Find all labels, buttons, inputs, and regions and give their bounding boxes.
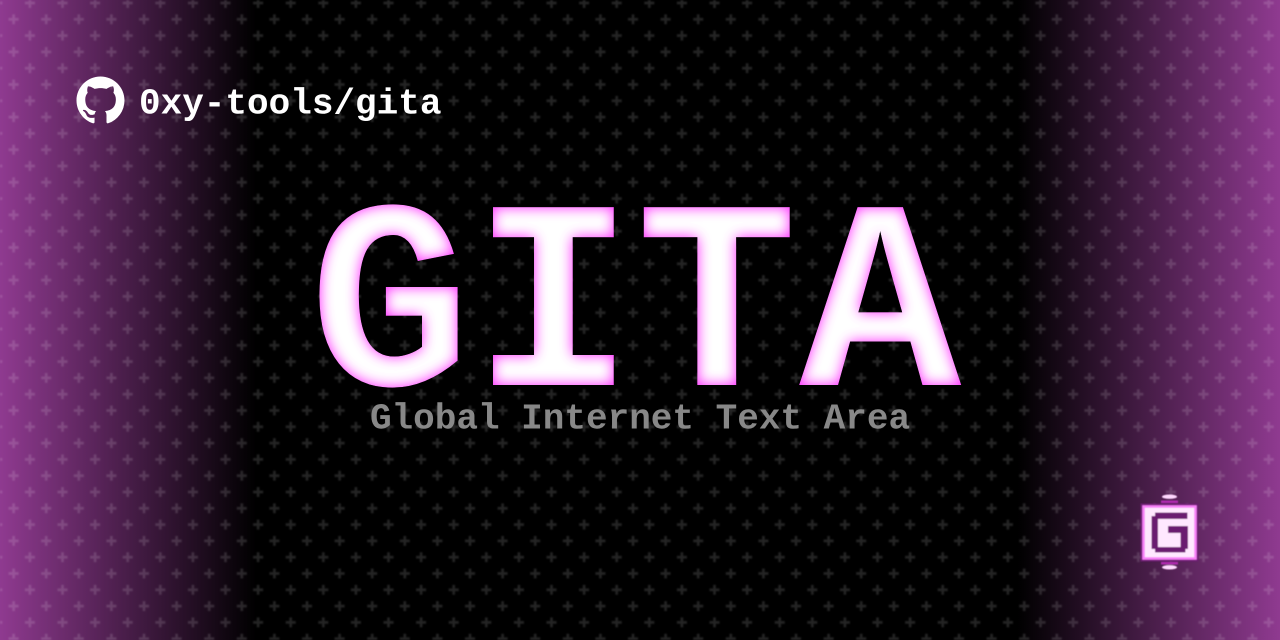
icon: github mark	[76, 76, 124, 123]
repository name: 0xy-tools/gita	[139, 84, 441, 124]
subtitle: Global Internet Text Area	[370, 398, 910, 440]
title: GITA: GITA	[309, 161, 964, 467]
icon: gita logo	[1140, 494, 1198, 570]
